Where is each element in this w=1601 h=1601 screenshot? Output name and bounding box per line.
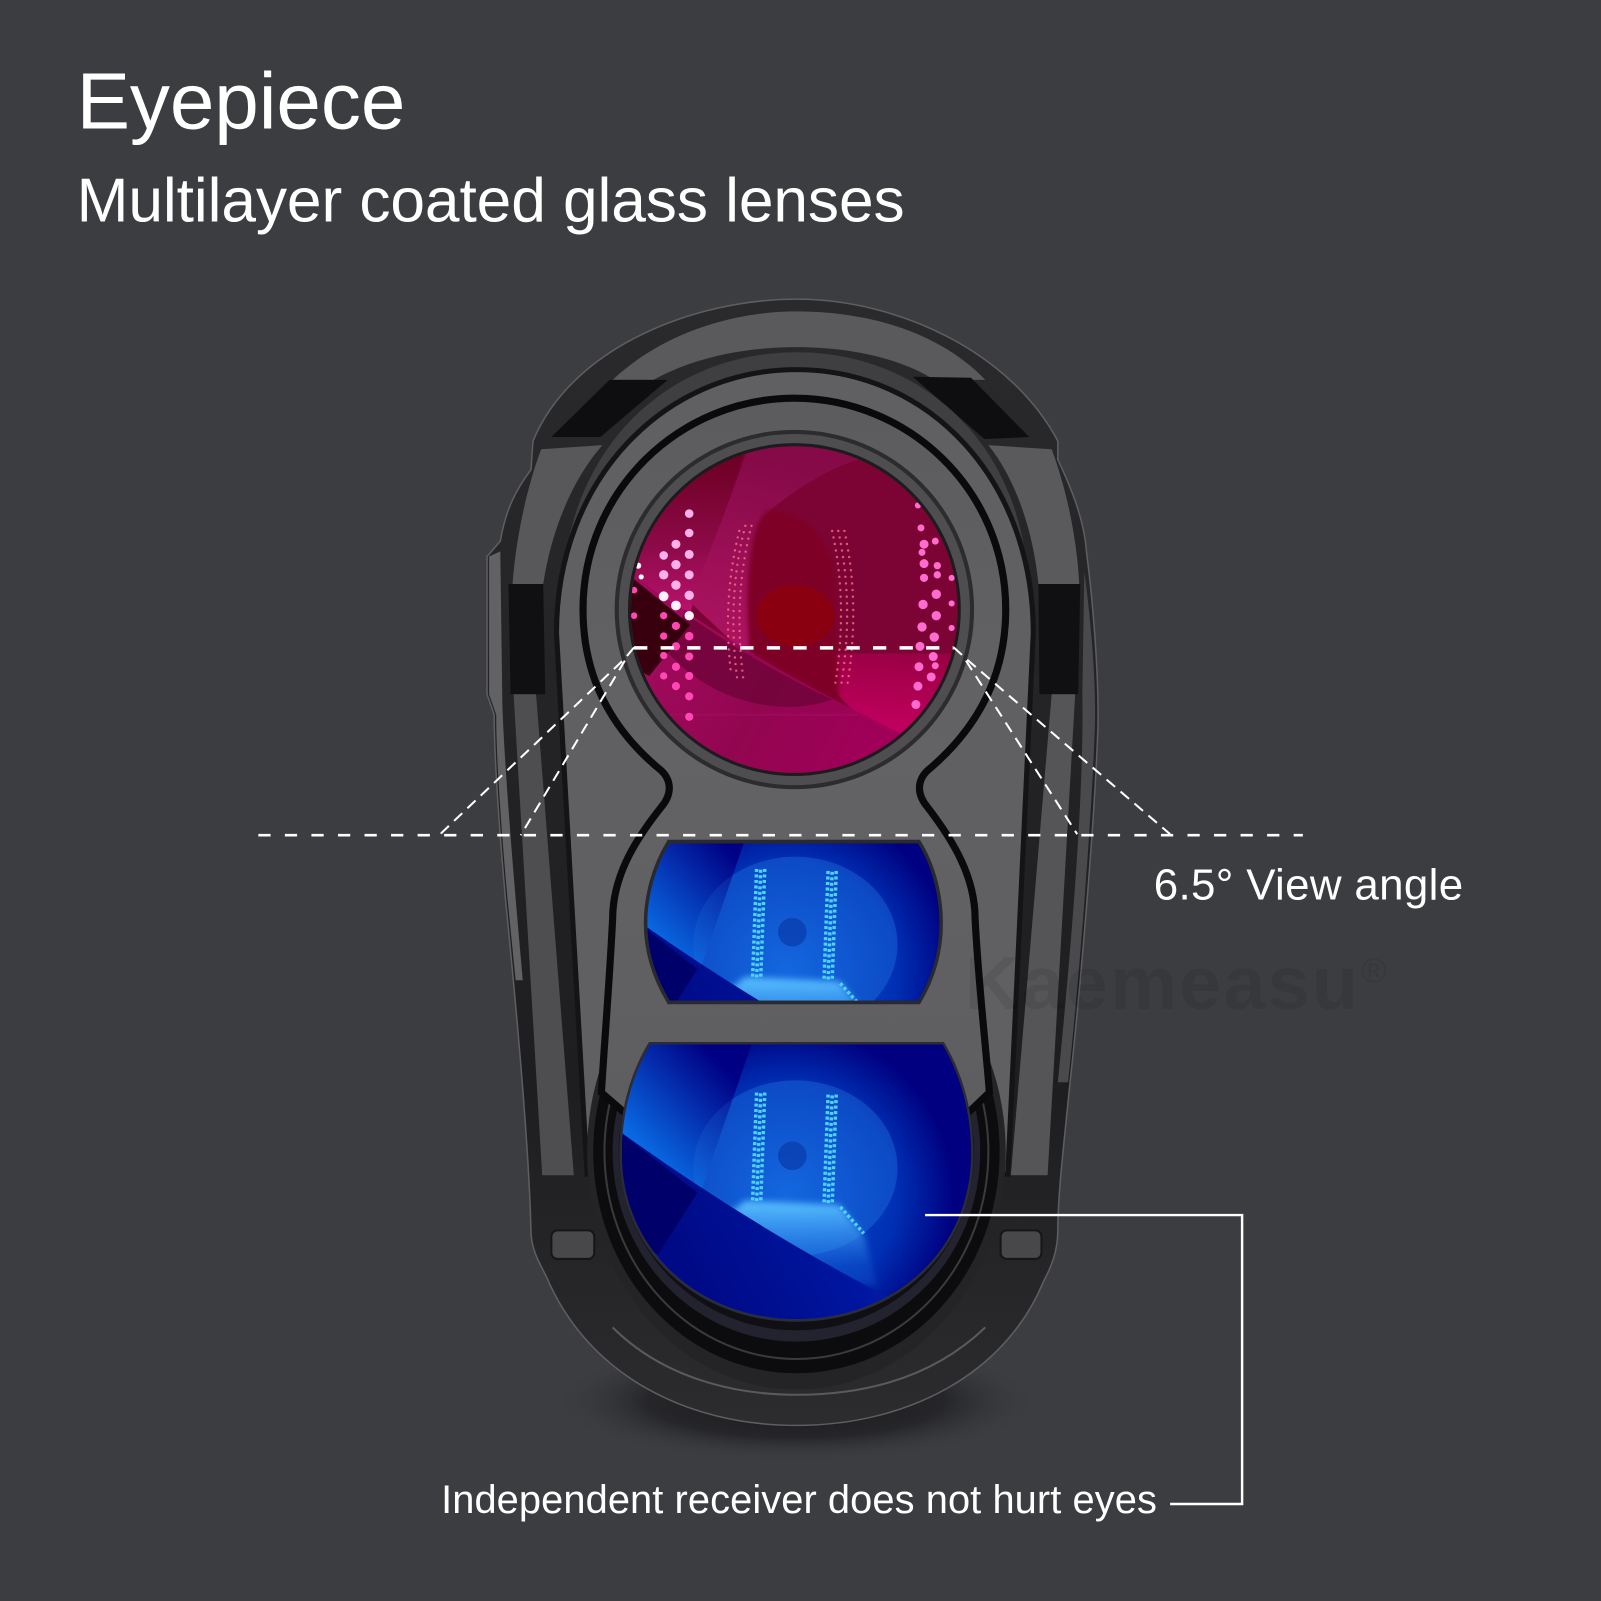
receiver callout line (925, 1215, 1242, 1504)
watermark: ® (1361, 952, 1387, 990)
upper dome band (564, 352, 1027, 572)
bright dots left (635, 509, 694, 620)
subtitle: Multilayer coated glass lenses (77, 167, 905, 236)
left body edge highlight (489, 551, 523, 980)
view angle diagram (258, 647, 1303, 835)
lower blue lens (622, 1044, 971, 1320)
drop shadow (551, 1340, 1041, 1462)
outer shell (487, 299, 1098, 1425)
side tab right (1001, 1230, 1041, 1259)
lower blue lens frame (622, 1045, 971, 1319)
black rail left (508, 584, 545, 694)
faint centre dot columns (728, 526, 853, 684)
receiver callout label: Independent receiver does not hurt eyes (441, 1478, 1157, 1522)
lower highlight arc (613, 1327, 985, 1395)
right angle rays (954, 647, 1170, 834)
lower side strip left (514, 694, 574, 1175)
figure-eight contour (583, 398, 1006, 1113)
view angle label: 6.5° View angle (1154, 861, 1463, 910)
upper side strip left (513, 445, 602, 584)
black shoulder block right (913, 377, 1029, 439)
hot pink dots lower left (631, 587, 693, 721)
title: Eyepiece (77, 57, 405, 146)
middle blue lens (647, 843, 940, 1001)
rangefinder device (487, 299, 1098, 1462)
upper side strip right (988, 445, 1079, 584)
side tab left (551, 1230, 594, 1259)
right body edge highlight (1058, 572, 1095, 1082)
left angle rays (439, 647, 634, 835)
lower side strip right (1011, 694, 1075, 1175)
top crescent (613, 311, 985, 380)
middle blue lens frame (647, 843, 939, 1001)
red eyepiece lens (631, 446, 958, 773)
black rail right (1038, 584, 1080, 694)
horizontal baseline (258, 834, 1303, 837)
eyepiece chord (634, 646, 954, 650)
lower lens concentric rings (587, 914, 1006, 1390)
watermark: Kaemeasu (965, 942, 1358, 1026)
bright dots right (911, 502, 955, 709)
black shoulder block left (551, 380, 668, 437)
red eyepiece ring (615, 430, 974, 789)
face plate (556, 370, 1033, 1174)
